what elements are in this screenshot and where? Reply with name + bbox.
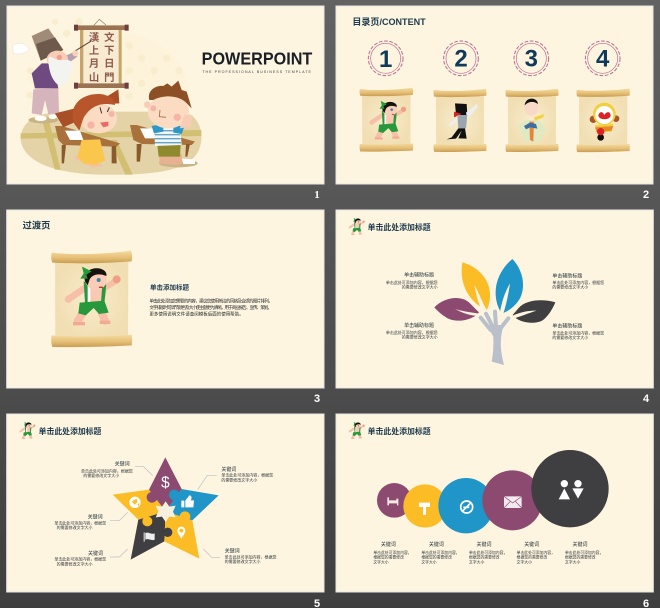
chart: tree: [434, 259, 555, 365]
number badge 2: [444, 41, 478, 76]
slide numbers: 1: [314, 189, 320, 201]
title: 单击此处添加标题: [368, 426, 431, 436]
label: lower right: [552, 323, 604, 340]
label: top right: 关键词: [221, 466, 236, 473]
panel: slide 1 cover: [7, 6, 324, 184]
title: 目录页/CONTENT: [352, 17, 426, 27]
label column 1: 关键词: [381, 541, 396, 548]
label column 2: [421, 541, 460, 564]
label: bottom left: 关键词: [88, 550, 103, 557]
label column 3: 单击此处可添加内容，: [469, 550, 507, 555]
icon: wall scroll: 下: [104, 45, 114, 57]
icon: mascot: [349, 422, 365, 439]
leaf: yellow: [462, 262, 490, 311]
piece: dark bottom left: [131, 511, 166, 560]
icon: mascot: [19, 422, 35, 439]
icon: mascot: [349, 218, 365, 235]
subheading: 单击添加标题: [150, 282, 190, 291]
scroll: opera child: [505, 89, 559, 152]
leaf: dark: [513, 300, 555, 323]
body text: 文字排版时可调节颜色及大小使主题更为清晰，用于商业报告、宣传、策划，: [149, 304, 272, 311]
panel: slide 4 tree: [336, 210, 653, 388]
label column 1: 文字大小: [373, 559, 389, 564]
number badge 3: [514, 41, 549, 76]
character: old teacher: [13, 28, 92, 121]
label: lower left: 的需要修改文字大小: [402, 334, 438, 340]
label: top right: [221, 466, 273, 482]
label column 2: 根据您的需要修改: [421, 555, 452, 560]
label: upper left: 单击辅助标题: [404, 272, 434, 279]
icon: wall scroll: 文: [104, 31, 115, 44]
icon: wall scroll: 上: [89, 44, 99, 57]
scroll: black cat: [433, 89, 487, 152]
icon: wall scroll: 山: [89, 71, 99, 84]
label: lower right: 的需要修改文字大小: [552, 334, 588, 340]
icon: people: [559, 480, 584, 499]
piece: purple top: [149, 457, 182, 511]
icon: thumbs up: [181, 495, 194, 507]
label: middle left: 关键词: [88, 514, 103, 521]
label: upper right: 单击此处可添加内容，根据您: [552, 279, 604, 285]
character: girl at desk: [55, 89, 120, 167]
title: 单击此处添加标题: [368, 222, 431, 232]
label: bottom left: [54, 550, 106, 566]
body text: 更多使用说明文件请查阅模板后面的使用帮助。: [149, 310, 244, 317]
label column 4: 单击此处可添加内容，: [517, 550, 555, 555]
label: top left: 关键词: [115, 460, 130, 467]
icon: envelope: [504, 496, 522, 508]
label: lower left: 单击辅助标题: [404, 322, 434, 329]
character: boy at desk: [130, 81, 195, 165]
label: lower right: 单击辅助标题: [552, 323, 582, 330]
label: upper left: 的需要修改文字大小: [402, 284, 438, 290]
label: top left: [81, 460, 133, 478]
label: top left: 的需要修改文字大小: [83, 472, 119, 478]
icon: signpost: [419, 503, 430, 515]
panel: slide 3 transition: [7, 210, 324, 388]
puzzle tabs: [142, 490, 190, 537]
panel: slide 5 puzzle star: [7, 414, 324, 592]
label column 5: 关键词: [573, 541, 587, 548]
number badge 1: 1: [379, 46, 392, 73]
label column 1: [373, 541, 412, 564]
number badge 1: [368, 41, 403, 76]
slide numbers: 2: [643, 189, 649, 201]
icon: wall scroll: 月: [89, 58, 99, 70]
title: POWERPOINT: POWERPOINT: [202, 48, 313, 68]
icon: no smoking: [461, 501, 473, 513]
label column 2: 文字大小: [421, 559, 437, 564]
scroll: calabash boy: [360, 88, 413, 152]
body text: [149, 298, 273, 317]
label column 5: 文字大小: [565, 559, 580, 564]
icon: globe: [129, 497, 141, 508]
label: upper right: 的需要修改文字大小: [552, 284, 588, 290]
piece: yellow left: [113, 490, 166, 520]
scroll illustration: [51, 251, 132, 347]
label column 3: 根据您的需要修改: [469, 555, 500, 560]
panel: slide 6 circles: [336, 414, 653, 592]
label column 4: 根据您的需要修改: [517, 555, 547, 560]
label: lower left: 单击此处可添加内容，根据您: [386, 329, 438, 335]
number badge 2: 2: [454, 45, 468, 72]
icon: wall scroll: [74, 19, 129, 89]
title: 过渡页: [23, 220, 50, 231]
icon: flag: [144, 532, 155, 542]
leaf: blue: [496, 259, 523, 314]
icon: map pin: [177, 527, 185, 539]
label: upper right: [552, 272, 604, 290]
label column 3: [469, 541, 507, 564]
label column 3: 关键词: [477, 541, 491, 548]
label: bottom right: 的需要修改文字大小: [225, 558, 261, 564]
label: bottom right: 单击此处可添加内容，根据您: [225, 553, 276, 559]
title: 单击此处添加标题: [39, 426, 101, 436]
label column 3: 文字大小: [469, 559, 484, 564]
piece: yellow bottom right: [164, 511, 199, 559]
label column 1: 根据您的需要修改: [373, 555, 404, 560]
scroll: monkey king: [576, 89, 630, 152]
label: bottom right: [225, 548, 276, 564]
label: bottom left: 的需要修改文字大小: [57, 560, 93, 566]
leaf: purple: [434, 298, 479, 321]
subtitle: THE PROFESSIONAL BUSINESS TEMPLATE: [202, 70, 312, 74]
slide numbers: 4: [643, 393, 650, 405]
label column 1: 单击此处可添加内容，: [373, 550, 412, 555]
icon: wall scroll: 日: [104, 58, 114, 70]
label: top right: 的需要修改文字大小: [221, 476, 257, 482]
number badge 3: 3: [525, 45, 538, 72]
label column 4: 关键词: [524, 541, 539, 548]
label: upper left: [386, 272, 438, 290]
icon: bed: [387, 497, 398, 505]
leader lines: [110, 466, 220, 557]
piece: blue right: [166, 489, 219, 520]
label column 4: 文字大小: [517, 559, 532, 564]
label column 2: 关键词: [429, 541, 444, 548]
panel: slide 2 contents: [336, 6, 653, 184]
chart: puzzle star: [113, 457, 219, 560]
label column 5: 根据您的需要修改: [565, 555, 596, 560]
label: bottom right: 关键词: [225, 548, 240, 555]
label column 5: [565, 541, 603, 564]
trunk: hand: [481, 312, 508, 365]
label: upper left: 单击此处可添加内容，根据您: [386, 279, 438, 285]
label: bottom left: 单击此处可添加内容，根据您: [54, 556, 106, 562]
label: upper right: 单击辅助标题: [552, 272, 582, 279]
slide numbers: [314, 189, 650, 608]
label: middle left: 的需要修改文字大小: [57, 524, 93, 530]
label column 4: [517, 541, 555, 564]
label: lower right: 单击此处可添加内容，根据您: [552, 329, 604, 335]
icon: wall scroll: 漢: [89, 31, 100, 44]
illustration: classroom: [13, 18, 201, 175]
body text: 单击此处添加您需要的内容，建议您使用简洁的风格及合适的图片排列，: [149, 298, 273, 305]
slide numbers: 3: [314, 393, 320, 405]
chart: overlapping circles: [377, 450, 609, 533]
label column 2: 单击此处可添加内容，: [421, 550, 460, 555]
number badge 4: 4: [596, 45, 610, 72]
number badge 4: [585, 41, 620, 76]
label: top right: 单击此处可添加内容，根据您: [221, 472, 273, 478]
label: middle left: 单击此处可添加内容，根据您: [54, 519, 106, 525]
icon: dollar: $: [161, 474, 170, 491]
label: top left: 单击此处可添加内容，根据您: [81, 467, 133, 473]
label: middle left: [54, 514, 106, 530]
label: lower left: [386, 322, 438, 340]
star centre: [156, 501, 176, 522]
label column 5: 单击此处可添加内容，: [565, 550, 603, 555]
icon: wall scroll: 門: [104, 72, 114, 84]
